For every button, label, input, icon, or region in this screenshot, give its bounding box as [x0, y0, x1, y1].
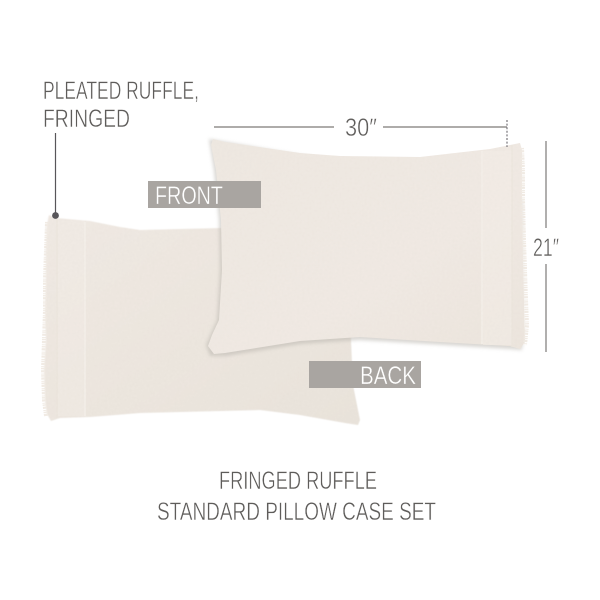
back pillow	[40, 210, 365, 430]
title	[157, 467, 436, 526]
front pillow fringe	[522, 148, 527, 345]
back pillow ruffle	[57, 219, 85, 418]
front pillow shadow	[206, 139, 522, 356]
height dimension: 21 inches: 21″	[533, 234, 559, 262]
fabric texture: back pillow	[40, 210, 365, 430]
width dimension: 30 inches: 30″	[345, 114, 377, 142]
label: front: FRONT	[155, 182, 223, 210]
callout: pleated ruffle, fringed	[43, 77, 199, 219]
fabric texture: front pillow	[205, 135, 530, 360]
callout: pleated ruffle, fringed: FRINGED	[43, 105, 130, 133]
label: back	[309, 361, 421, 390]
front pillow	[205, 135, 530, 360]
title: STANDARD PILLOW CASE SET	[157, 498, 436, 526]
title: FRINGED RUFFLE	[219, 467, 377, 495]
label: back: BACK	[360, 362, 416, 390]
front pillow ruffle	[482, 145, 512, 347]
back pillow fringe	[43, 222, 47, 416]
callout: pleated ruffle, fringed: PLEATED RUFFLE,	[43, 77, 199, 105]
